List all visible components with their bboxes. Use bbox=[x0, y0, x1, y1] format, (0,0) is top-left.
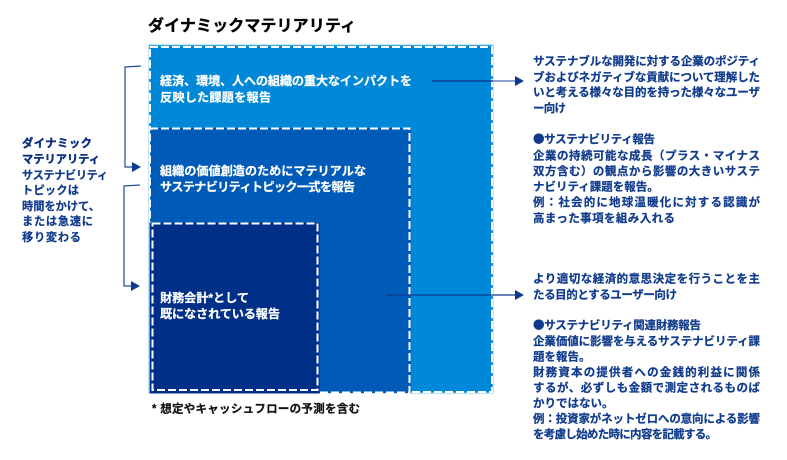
text block: sustainability-related financial reporting: 例：投資家がネットゼロへの意向による影響 bbox=[533, 412, 760, 426]
panel: nested materiality boxes bbox=[148, 44, 494, 394]
arrow: bracket to inner box bbox=[124, 185, 140, 291]
text block: sustainability reporting: ●サステナビリティ報告 bbox=[533, 131, 655, 147]
text block: sustainability reporting: 企業の持続可能な成長（プラス・マイナス bbox=[533, 148, 760, 162]
left explanatory text bbox=[22, 136, 108, 244]
inner box text: 既になされている報告 bbox=[160, 306, 280, 321]
text block: sustainability-related financial reporting: 企業価値に影響を与えるサステナビリティ課 bbox=[533, 334, 760, 348]
text block: sustainability report users: サステナブルな開発に対する企業のポジティ bbox=[533, 54, 760, 68]
left explanatory text: または急速に bbox=[22, 214, 93, 228]
text block: sustainability-related financial reporting bbox=[533, 317, 760, 441]
text block: financial report users: たる目的とするユーザー向け bbox=[533, 288, 677, 302]
footnote: * 想定やキャッシュフローの予測を含む bbox=[152, 402, 360, 416]
arrow: lower boxes to financial reporting text bbox=[386, 290, 524, 300]
left explanatory text: 時間をかけて、 bbox=[22, 199, 100, 213]
text block: sustainability-related financial reporting: ●サステナビリティ関連財務報告 bbox=[533, 317, 701, 333]
text block: sustainability reporting: 例：社会的に地球温暖化に対する認識が bbox=[533, 195, 760, 209]
text block: sustainability reporting: 双方含む）の観点から影響の大きいサステ bbox=[533, 164, 760, 178]
panel: enterprise value reporting middle box bbox=[150, 128, 411, 393]
outer box text: 反映した課題を報告 bbox=[160, 90, 271, 104]
text block: sustainability report users bbox=[533, 54, 760, 115]
text block: sustainability-related financial reporting: 題を報告。 bbox=[533, 350, 590, 364]
arrow: bracket to middle box bbox=[125, 66, 141, 172]
left explanatory text: 移り変わる bbox=[22, 230, 81, 244]
middle box text: サステナビリティトピック一式を報告 bbox=[160, 179, 355, 194]
left explanatory text: マテリアリティ bbox=[22, 153, 100, 166]
text block: sustainability-related financial reporting: を考慮し始めた時に内容を記載する。 bbox=[533, 427, 717, 441]
text block: sustainability-related financial reporting: 財務資本の提供者への金銭的利益に関係 bbox=[533, 365, 760, 379]
text block: sustainability reporting: 高まった事項を組み入れる bbox=[533, 211, 675, 225]
text block: sustainability report users: いと考える様々な目的を持った様々なユーザ bbox=[533, 85, 760, 99]
panel: sustainability reporting outer box bbox=[148, 44, 494, 394]
text block: financial report users: より適切な経済的意思決定を行うことを主 bbox=[533, 272, 760, 286]
middle box text: 組織の価値創造のためにマテリアルな bbox=[160, 163, 366, 178]
left explanatory text: サステナビリティ bbox=[22, 168, 108, 182]
arrow: upper box to sustainability reporting text bbox=[432, 76, 524, 86]
title: ダイナミックマテリアリティ bbox=[148, 16, 356, 35]
outer box text: 経済、環境、人への組織の重大なインパクトを bbox=[160, 73, 412, 88]
text block: sustainability report users: ブおよびネガティブな貢献について理解した bbox=[533, 70, 760, 84]
left explanatory text: トピックは bbox=[22, 184, 79, 197]
left explanatory text: ダイナミック bbox=[22, 136, 92, 150]
panel: financial accounting inner box bbox=[150, 222, 320, 394]
inner box text bbox=[160, 290, 280, 321]
middle box text bbox=[160, 163, 366, 194]
inner box text: 財務会計*として bbox=[160, 290, 249, 305]
text block: sustainability-related financial reporting: かりではない。 bbox=[533, 397, 614, 410]
text block: sustainability reporting: ナビリティ課題を報告。 bbox=[533, 180, 659, 194]
text block: sustainability reporting bbox=[533, 131, 760, 225]
outer box text bbox=[160, 73, 412, 104]
text block: sustainability report users: ー向け bbox=[533, 101, 566, 115]
text block: sustainability-related financial reporting: するが、必ずしも金額で測定されるものば bbox=[533, 380, 760, 394]
text block: financial report users bbox=[533, 272, 760, 302]
